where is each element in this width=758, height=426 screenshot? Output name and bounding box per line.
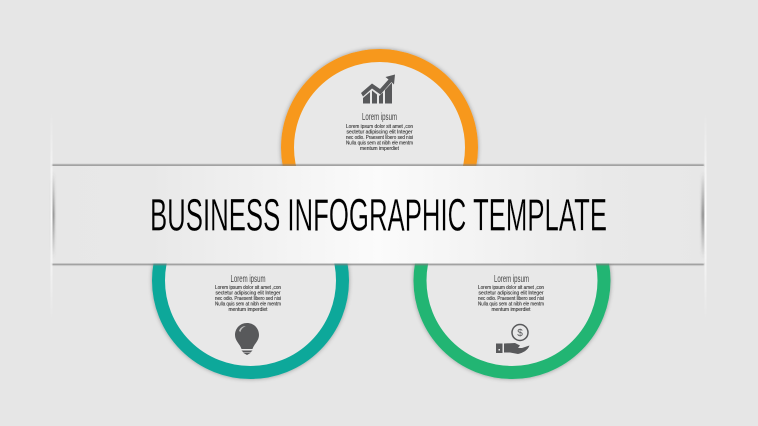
- body text: Lorem ipsum dolor sit amet ,con: [346, 124, 413, 130]
- body text: Lorem ipsum dolor sit amet ,con: [478, 285, 544, 291]
- heading: Lorem ipsum: [230, 274, 266, 285]
- body text: mentum imperdiet: [492, 307, 531, 313]
- teal ring: [158, 188, 342, 372]
- body text: nec odio. Praesent libero sed nisi: [215, 296, 281, 302]
- left fold: [52, 172, 54, 258]
- icon: hand with coin: [496, 324, 530, 354]
- body text: [478, 285, 544, 313]
- banner edge shadows: [52, 164, 704, 166]
- icon: hand with coin: $: [517, 328, 523, 339]
- body text: [346, 124, 413, 152]
- body text: Lorem ipsum dolor sit amet ,con: [215, 285, 281, 291]
- body text: Nulla quis sem at nibh ele mentm: [478, 302, 544, 308]
- body text: nec odio. Praesent libero sed nisi: [478, 296, 544, 302]
- body text: mentum imperdiet: [228, 307, 268, 313]
- body text: sectetur adipiscing elit Integer: [346, 130, 413, 136]
- icon: light bulb: [235, 323, 259, 355]
- body text: Nulla quis sem at nibh ele mentm: [215, 302, 281, 308]
- icon: growth chart: [361, 74, 395, 104]
- body text: mentum imperdiet: [360, 146, 400, 152]
- right fold: [702, 172, 704, 258]
- orange ring: [288, 56, 472, 240]
- banner strip: [52, 166, 704, 264]
- panel: top circle: [288, 56, 472, 240]
- banner: [50, 112, 706, 320]
- heading: Lorem ipsum: [362, 112, 397, 123]
- body text: sectetur adipiscing elit Integer: [478, 290, 544, 296]
- body text: sectetur adipiscing elit Integer: [216, 290, 281, 296]
- body text: nec odio. Praesent libero sed nisi: [346, 135, 413, 141]
- body text: [215, 285, 281, 313]
- panel: right circle: [420, 188, 604, 372]
- green ring: [420, 188, 604, 372]
- body text: Nulla quis sem at nibh ele mentm: [346, 140, 413, 146]
- heading: Lorem ipsum: [494, 274, 529, 285]
- panel: left circle: [158, 188, 342, 372]
